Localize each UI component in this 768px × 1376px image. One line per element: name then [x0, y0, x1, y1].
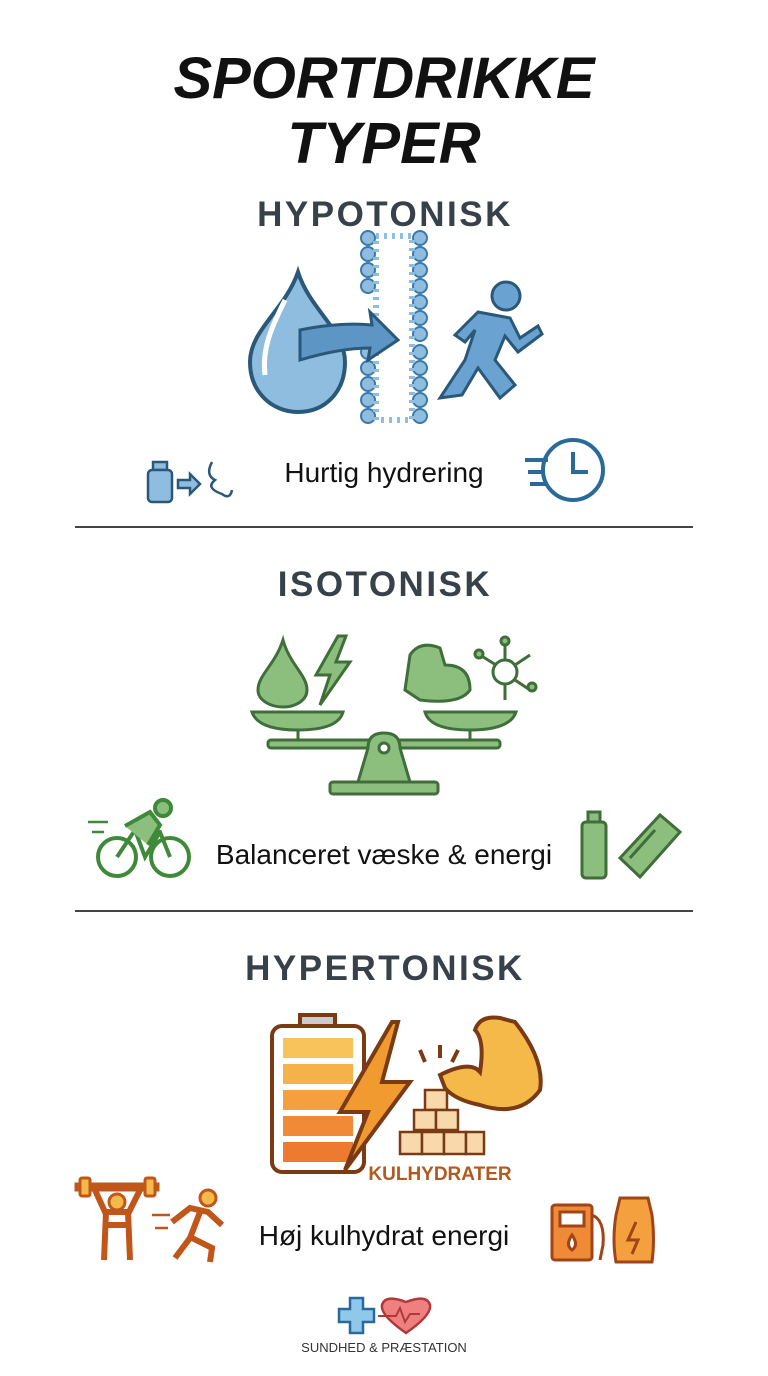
- text: hoj kulhydrat energi: Høj kulhydrat energi: [259, 1220, 509, 1251]
- title: TYPER: [287, 111, 481, 176]
- text: balanceret: Balanceret væske & energi: [216, 839, 552, 870]
- heading: hypertonisk: HYPERTONISK: [245, 949, 525, 988]
- icon: bolt: [340, 1022, 410, 1170]
- icon: weightlifter and runner: [76, 1178, 222, 1262]
- arrow: [300, 312, 398, 360]
- icon: battery: [272, 1015, 364, 1172]
- footer logo: SUNDHED & PRÆSTATION: [301, 1340, 467, 1355]
- title: SPORTDRIKKE: [173, 46, 597, 111]
- icon: bottle: [148, 462, 232, 502]
- icon: clock: [525, 440, 603, 500]
- footer logo: [301, 1298, 467, 1355]
- icon: bottle and bar: [582, 812, 680, 878]
- label: kulhydrater: KULHYDRATER: [368, 1164, 512, 1185]
- text: hurtig hydrering: Hurtig hydrering: [284, 457, 484, 488]
- heading: hypotonisk: HYPOTONISK: [257, 195, 513, 234]
- icon: water drop: [250, 272, 345, 412]
- icon: muscle: [420, 1018, 541, 1109]
- icon: sugar cubes: [400, 1090, 484, 1154]
- icon: scale: [252, 636, 536, 794]
- title: [173, 46, 597, 176]
- icon: cyclist: [88, 800, 189, 876]
- icon: fuel pump and gel: [552, 1198, 654, 1262]
- icon: runner: [440, 282, 542, 398]
- icon: membrane: [361, 231, 427, 423]
- heading: isotonisk: ISOTONISK: [278, 565, 492, 604]
